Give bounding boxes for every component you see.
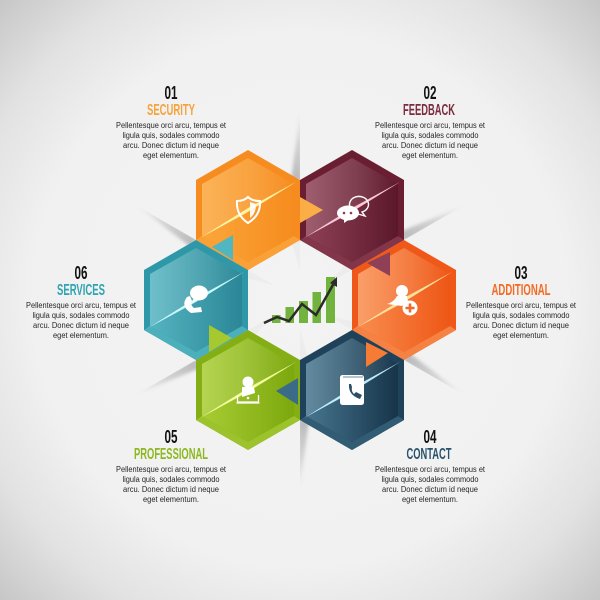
text block 04 contact: CONTACT <box>406 446 452 463</box>
text block 04 contact: Pellentesque orci arcu, tempus et <box>375 465 486 474</box>
hexagon 1: security <box>196 150 300 270</box>
text block 01 security: arcu. Donec dictum id neque <box>123 141 220 150</box>
text block 05 professional: Pellentesque orci arcu, tempus et <box>116 465 227 474</box>
text block 02 feedback: arcu. Donec dictum id neque <box>382 141 479 150</box>
text block 02 feedback: ligula quis, sodales commodo <box>382 131 479 140</box>
text block 02 feedback: 02 <box>424 83 436 103</box>
tab: teal triangle <box>212 235 233 260</box>
text block 03 additional <box>466 263 577 340</box>
text block 03 additional: ADDITIONAL <box>492 282 550 299</box>
glint <box>200 362 296 418</box>
text block 05 professional <box>116 427 227 504</box>
hexagon 3: additional <box>352 240 456 360</box>
tab: orange triangle <box>300 197 323 223</box>
text block 04 contact: ligula quis, sodales commodo <box>382 475 479 484</box>
text block 06 services: ligula quis, sodales commodo <box>32 311 130 320</box>
text block 03 additional: eget elementum. <box>493 331 549 340</box>
text block 03 additional: ligula quis, sodales commodo <box>472 311 570 320</box>
text block 06 services: Pellentesque orci arcu, tempus et <box>26 301 137 310</box>
text block 05 professional: arcu. Donec dictum id neque <box>123 485 220 494</box>
text block 05 professional: PROFESSIONAL <box>134 446 208 463</box>
tab: navy triangle <box>276 378 298 405</box>
hexagon 5: professional <box>196 330 300 450</box>
fold shadows <box>133 112 467 488</box>
text block 02 feedback: eget elementum. <box>402 151 458 160</box>
hexagon 2: feedback <box>300 150 404 270</box>
text block 01 security: SECURITY <box>147 102 195 119</box>
text block 02 feedback <box>375 83 486 160</box>
text block 03 additional: Pellentesque orci arcu, tempus et <box>466 301 577 310</box>
hexagon 4: contact <box>300 330 404 450</box>
text block 06 services: eget elementum. <box>53 331 109 340</box>
text block 03 additional: 03 <box>514 263 528 283</box>
text block 05 professional: 05 <box>164 427 178 447</box>
text block 01 security: ligula quis, sodales commodo <box>122 131 220 140</box>
tab: red-orange triangle <box>366 342 388 367</box>
text block 01 security: 01 <box>164 83 178 103</box>
glint <box>200 182 296 238</box>
icon: chat bubbles <box>337 196 368 223</box>
text block 01 security: Pellentesque orci arcu, tempus et <box>116 121 227 130</box>
text block 06 services: arcu. Donec dictum id neque <box>33 321 130 330</box>
tab: maroon triangle <box>367 252 390 276</box>
text block 04 contact: eget elementum. <box>402 495 458 504</box>
text block 05 professional: ligula quis, sodales commodo <box>122 475 220 484</box>
icon: shield <box>237 197 260 223</box>
text block 03 additional: arcu. Donec dictum id neque <box>473 321 570 330</box>
icon: phone book <box>340 375 364 405</box>
text block 02 feedback: Pellentesque orci arcu, tempus et <box>375 121 486 130</box>
icon: person at laptop <box>236 376 260 403</box>
growth chart <box>264 277 337 323</box>
text block 06 services: 06 <box>74 263 88 283</box>
text block 04 contact <box>375 427 486 504</box>
text block 02 feedback: FEEDBACK <box>403 102 455 119</box>
icon: person plus <box>387 285 418 316</box>
text block 01 security <box>116 83 227 160</box>
glint <box>304 362 400 418</box>
text block 04 contact: 04 <box>424 427 436 447</box>
text block 06 services <box>26 263 137 340</box>
glint <box>356 272 452 328</box>
text block 06 services: SERVICES <box>57 282 105 299</box>
tab: green triangle <box>209 325 232 352</box>
icon: phone and speech <box>184 286 208 313</box>
text block 04 contact: arcu. Donec dictum id neque <box>382 485 479 494</box>
glint <box>148 272 244 328</box>
hexagon 6: services <box>144 240 248 360</box>
text block 05 professional: eget elementum. <box>143 495 199 504</box>
glint <box>304 182 400 238</box>
text block 01 security: eget elementum. <box>143 151 199 160</box>
